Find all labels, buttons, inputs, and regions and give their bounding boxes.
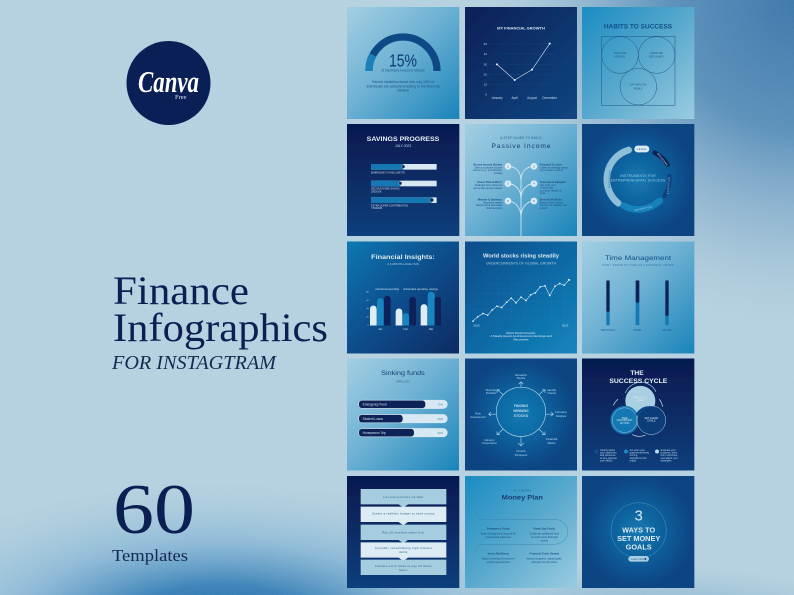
gauge value: 15% — [389, 50, 417, 70]
caption: Recoveries — [514, 337, 529, 341]
line chart: January — [491, 96, 503, 100]
legend items: and outcomes — [600, 454, 616, 457]
step text left: rentals) — [494, 171, 502, 175]
line chart: 2013 — [473, 323, 480, 327]
venn cycle: CONSISTENT — [617, 419, 633, 422]
caption — [490, 331, 552, 341]
title: 6-STEP GUIDE TO BUILD — [500, 136, 542, 140]
step text left: Choose Income Stream: — [473, 162, 502, 166]
logo: Canva Free badge — [126, 41, 210, 125]
ring labels: BRANDING — [656, 153, 668, 167]
ring center text: INSTRUMENTS FOR — [620, 174, 656, 178]
gauge text: markets — [397, 89, 409, 93]
legend items — [594, 449, 678, 462]
venn cycle: GOALS — [647, 419, 656, 422]
flow steps: List and prioritize all debt — [383, 495, 424, 499]
step text right: to reduce hands-on — [540, 188, 562, 192]
panel: world stocks — [465, 242, 577, 353]
arrow labels: Comparison — [482, 441, 497, 445]
venn labels: REGULARLY — [649, 55, 664, 58]
fund bars — [358, 400, 448, 437]
center label — [513, 404, 529, 418]
button: Learn more — [631, 558, 645, 561]
venn labels: MINDFUL — [614, 55, 626, 58]
bar chart: savings — [429, 287, 438, 291]
venn cycle: SET CLEAR — [644, 417, 658, 420]
arrow labels: Analysis — [556, 414, 567, 418]
legend items: your objectives — [600, 451, 617, 454]
logo: Canva Free badge: Canva — [138, 64, 199, 99]
ring labels: MARKETING — [608, 170, 612, 188]
step text left: source (e.g., investments, — [473, 168, 503, 172]
center label: WINNING — [513, 409, 529, 413]
legend items: from outcomes, — [661, 454, 678, 457]
plan text: Assess progress, adjust goals, — [526, 557, 563, 561]
flow steps: Consider consolidating high-interest — [375, 546, 432, 550]
plan text: Save a designated amount for — [481, 532, 516, 536]
ring labels — [608, 148, 671, 212]
panel: entrepreneurial instruments ring — [582, 124, 694, 236]
legend items: Act upon your — [630, 449, 645, 452]
step text left — [473, 162, 503, 210]
timeline curve — [475, 511, 568, 552]
tree diagram: 5 — [507, 199, 509, 203]
gauge text — [367, 69, 440, 93]
center label: STOCKS — [514, 414, 529, 418]
heading: Finance Infographics: Infographics — [113, 305, 328, 350]
arrow labels: Identify — [547, 388, 557, 392]
plan text: Rainy Day Funds — [534, 526, 556, 530]
panel: money plan — [465, 476, 577, 588]
ring center text — [611, 174, 666, 182]
step text left: improvements — [486, 206, 503, 210]
step text left: Dedicate time upfront to — [475, 183, 503, 187]
bar chart: 20 — [366, 316, 369, 318]
legend items: and adjust your — [661, 457, 678, 460]
venn cycle — [610, 382, 666, 436]
step text right: Research & Learn: — [540, 162, 563, 166]
bar chart: Jan — [378, 327, 383, 331]
step text right: Use tools and — [540, 183, 556, 187]
step text right: Expand with multiple — [540, 200, 564, 204]
line chart: 0 — [485, 93, 487, 97]
flow steps: faster — [399, 568, 408, 572]
legend items: Evaluate your — [661, 449, 676, 452]
legend items: Clearly define — [600, 449, 616, 452]
line chart: 30 — [484, 62, 487, 66]
bar chart: 80 — [366, 291, 369, 293]
step text left: performance and make — [476, 203, 503, 207]
title: THE — [630, 370, 644, 377]
tree diagram: 2 — [533, 164, 535, 168]
panel: 15% gauge — [347, 7, 459, 119]
progress bars: 2500/10K — [371, 190, 382, 193]
circle outline — [611, 503, 666, 558]
center label: FINDING — [514, 404, 528, 408]
line chart: 50 — [484, 42, 487, 46]
gauge text: of Germans Invest in Stocks — [381, 69, 425, 73]
heading: Finance Infographics — [113, 268, 328, 350]
step text right: sources for stability and — [540, 203, 567, 207]
stat: 60 templates: 60 — [113, 471, 195, 549]
line chart: 40 — [484, 52, 487, 56]
step text left: Regularly review — [483, 200, 502, 204]
plan text: needs — [541, 539, 549, 543]
panel: sinking funds — [347, 358, 459, 470]
panel: success cycle — [582, 358, 694, 470]
progress bars: EMERGENCY FUND 3,897/7K — [371, 171, 406, 174]
fund bars: 50% — [438, 417, 444, 421]
panel: passive income: Passive Income — [491, 143, 551, 150]
step text left: Invest Time & Effort: — [477, 180, 502, 184]
legend items: reality — [630, 459, 637, 462]
fund bars: 75% — [438, 402, 444, 406]
ring segments — [603, 144, 673, 214]
venn diagram — [602, 36, 675, 105]
panel: financial insights: A 3-MONTH ANALYSIS — [387, 262, 419, 266]
plan text: Financial Goals Review — [530, 551, 560, 555]
panel: world stocks: UNDERCURRENTS OF GLOBAL GROWTH — [486, 261, 557, 265]
line chart: 10 — [484, 83, 487, 87]
arrow labels: Diversify — [486, 388, 497, 392]
progress bars: EXTRA SUPER CONTRIBUTION — [371, 204, 408, 207]
plan text: for short-term financial — [531, 535, 558, 539]
plan text: Emergency Funds — [487, 526, 510, 530]
arrow labels: Financial — [546, 437, 558, 441]
gauge text: individuals are actively investing in the financial — [367, 84, 440, 88]
bar chart: Mar — [429, 327, 433, 331]
cover text: SET MONEY — [617, 534, 660, 543]
line chart: April — [511, 96, 518, 100]
panel: money plan: Money Plan — [502, 495, 543, 502]
arrow labels: Company — [555, 410, 568, 414]
legend items: goals persistently, — [630, 451, 650, 454]
title: Sinking funds — [381, 370, 425, 377]
tree diagram: 3 — [507, 182, 509, 186]
line chart: 20 — [484, 72, 487, 76]
venn cycle: ADAPT — [636, 399, 645, 402]
title: World stocks rising steadily — [483, 253, 560, 259]
title — [609, 370, 668, 385]
line chart: December — [542, 96, 557, 100]
step text left: set up the income stream — [473, 186, 502, 190]
caption: World Stocks Flourish: — [506, 331, 536, 335]
flow steps — [361, 489, 446, 575]
logo: Canva Free badge: Free — [175, 94, 187, 101]
step text right: Automate & Delegate: — [540, 180, 567, 184]
stat: 60 templates: Templates — [112, 546, 188, 565]
stacked bars: SOCIAL — [662, 328, 672, 332]
panel: financial insights — [347, 242, 459, 353]
legend items: strategies — [661, 459, 672, 462]
arrow labels: Industry — [484, 438, 495, 442]
step text right: Diversify Portfolio: — [540, 197, 563, 201]
arrow labels: Trends — [547, 391, 557, 395]
flow steps: Allocate extra funds to pay off debts — [375, 564, 432, 568]
flow steps: debts — [399, 550, 408, 554]
panel: savings progress: JULY 2023 — [394, 144, 411, 148]
venn labels: PRACTICE — [614, 52, 627, 55]
cover text: WAYS TO — [622, 525, 655, 534]
progress bars: 7,500/10K — [371, 207, 383, 210]
gauge arc — [369, 37, 437, 71]
panel: finding winning stocks — [465, 358, 577, 470]
title: HABITS TO SUCCESS — [604, 24, 672, 31]
bar chart: 0 — [367, 325, 369, 327]
step text right — [540, 162, 568, 210]
step text left: Monitor & Optimize: — [478, 197, 502, 201]
cover text: GOALS — [626, 542, 652, 551]
plan text — [481, 526, 563, 564]
arrow labels — [470, 373, 568, 457]
tree diagram: 1 — [507, 164, 509, 168]
bar chart: intentional spending — [376, 287, 400, 291]
venn labels: EXERCISE — [650, 52, 663, 55]
progress bars: SECOND HOME SAVING — [371, 188, 400, 191]
stacked bars — [601, 280, 672, 332]
ring labels: LEGAL — [637, 148, 647, 151]
fund bars: 60% — [438, 431, 444, 435]
legend items: your efforts — [600, 459, 613, 462]
line chart: 2023 — [562, 323, 569, 327]
arrow labels: Ratios — [548, 441, 556, 445]
step text right: outsourcing — [540, 186, 554, 190]
legend items: to give purpose — [600, 457, 618, 460]
plan text: Invest My Money — [488, 551, 509, 555]
venn cycle: REFLECT & — [634, 396, 647, 399]
title: Time Management — [605, 255, 671, 262]
bar chart: Feb — [403, 327, 408, 331]
fund bars: Student Loans — [363, 417, 383, 421]
panel: 3 ways to set money goals — [582, 476, 694, 588]
chart title: MY FINANCIAL GROWTH — [497, 26, 545, 31]
step text right: work — [540, 191, 546, 195]
ring center text: ENTREPRENEURIAL SUCCESS — [611, 178, 666, 182]
progress bars — [371, 164, 437, 210]
venn labels: MEALS — [634, 87, 643, 90]
bar chart: unintended spending — [403, 287, 428, 291]
tree diagram: 6 — [533, 199, 535, 203]
tree diagram — [505, 163, 537, 236]
plan text: and plan for the future — [531, 560, 558, 564]
arrow labels: Prospects — [515, 453, 528, 457]
arrow labels: Research — [515, 373, 527, 377]
stacked bars: PERSONAL — [601, 328, 616, 332]
legend items: aspirations into — [630, 457, 647, 460]
title: MY 6 MONTH — [513, 489, 531, 493]
panel: time management: HOW I SPEND MY TIME AS A BUSINESS OWNER — [602, 264, 674, 267]
plan text: growth opportunities — [486, 560, 511, 564]
panel: debt flow — [347, 476, 459, 588]
step text right: your chosen method — [540, 168, 564, 172]
arrow labels: Risk — [475, 411, 481, 415]
line chart: August — [527, 96, 537, 100]
panel: habits to success — [582, 7, 694, 119]
panel: passive income — [465, 124, 577, 236]
flow steps: Pay off smallest debts first — [382, 530, 424, 534]
arrow labels: Portfolio — [486, 391, 497, 395]
title: SUCCESS CYCLE — [609, 378, 668, 385]
fund bars: Honeymoon Trip — [363, 431, 386, 435]
venn labels: EAT HEALTHY — [630, 84, 647, 87]
line chart — [484, 42, 558, 100]
bar chart: 60 — [366, 300, 369, 302]
ring labels: EDUCATION — [667, 177, 671, 194]
venn cycle: ACTION — [620, 422, 630, 425]
center circle — [496, 387, 546, 436]
subheading: FOR INSTAGTRAM — [111, 352, 277, 374]
title: SAVINGS PROGRESS — [367, 136, 440, 143]
flow steps: Create a realistic budget to save money — [372, 511, 435, 515]
step text right: Gather knowledge about — [540, 165, 568, 169]
plan text: unexpected expenses — [485, 535, 512, 539]
venn labels — [614, 52, 664, 90]
legend items: turning — [630, 454, 638, 457]
arrow labels: Stocks — [517, 376, 526, 380]
arrows — [489, 382, 553, 446]
panel: time management — [582, 242, 694, 353]
ring labels: INNOVATION — [634, 205, 653, 212]
legend items: progress, learn — [661, 451, 678, 454]
venn cycle: TAKE — [622, 417, 628, 420]
plan text: Create an additional fund — [529, 532, 560, 536]
title: Financial Insights: — [371, 254, 435, 261]
arrow labels: Assessment — [470, 415, 486, 419]
bar chart: 40 — [366, 308, 369, 310]
bar chart — [366, 287, 441, 331]
caption: A Steady Ascent Amid Economic Earnings and — [490, 334, 552, 338]
line chart — [472, 276, 570, 327]
heading: Finance Infographics: Finance — [113, 268, 249, 313]
plan text: Begin investing in long-term — [482, 557, 516, 561]
panel: my financial growth — [465, 7, 577, 119]
fund bars: Emergency Fund — [363, 402, 387, 406]
stacked bars: WORK — [633, 328, 642, 332]
arrow labels: Growth — [516, 449, 526, 453]
step text right: growth — [540, 206, 548, 210]
panel: sinking funds: APRIL 2023 — [396, 380, 410, 383]
cover text: 3 — [635, 508, 643, 524]
tree diagram: 4 — [533, 182, 535, 186]
gauge text: Recent statistics reveal that only 15% of — [372, 80, 434, 84]
cover text — [617, 508, 660, 551]
panel: savings progress — [347, 124, 459, 236]
step text left: Select a passive income — [475, 165, 503, 169]
